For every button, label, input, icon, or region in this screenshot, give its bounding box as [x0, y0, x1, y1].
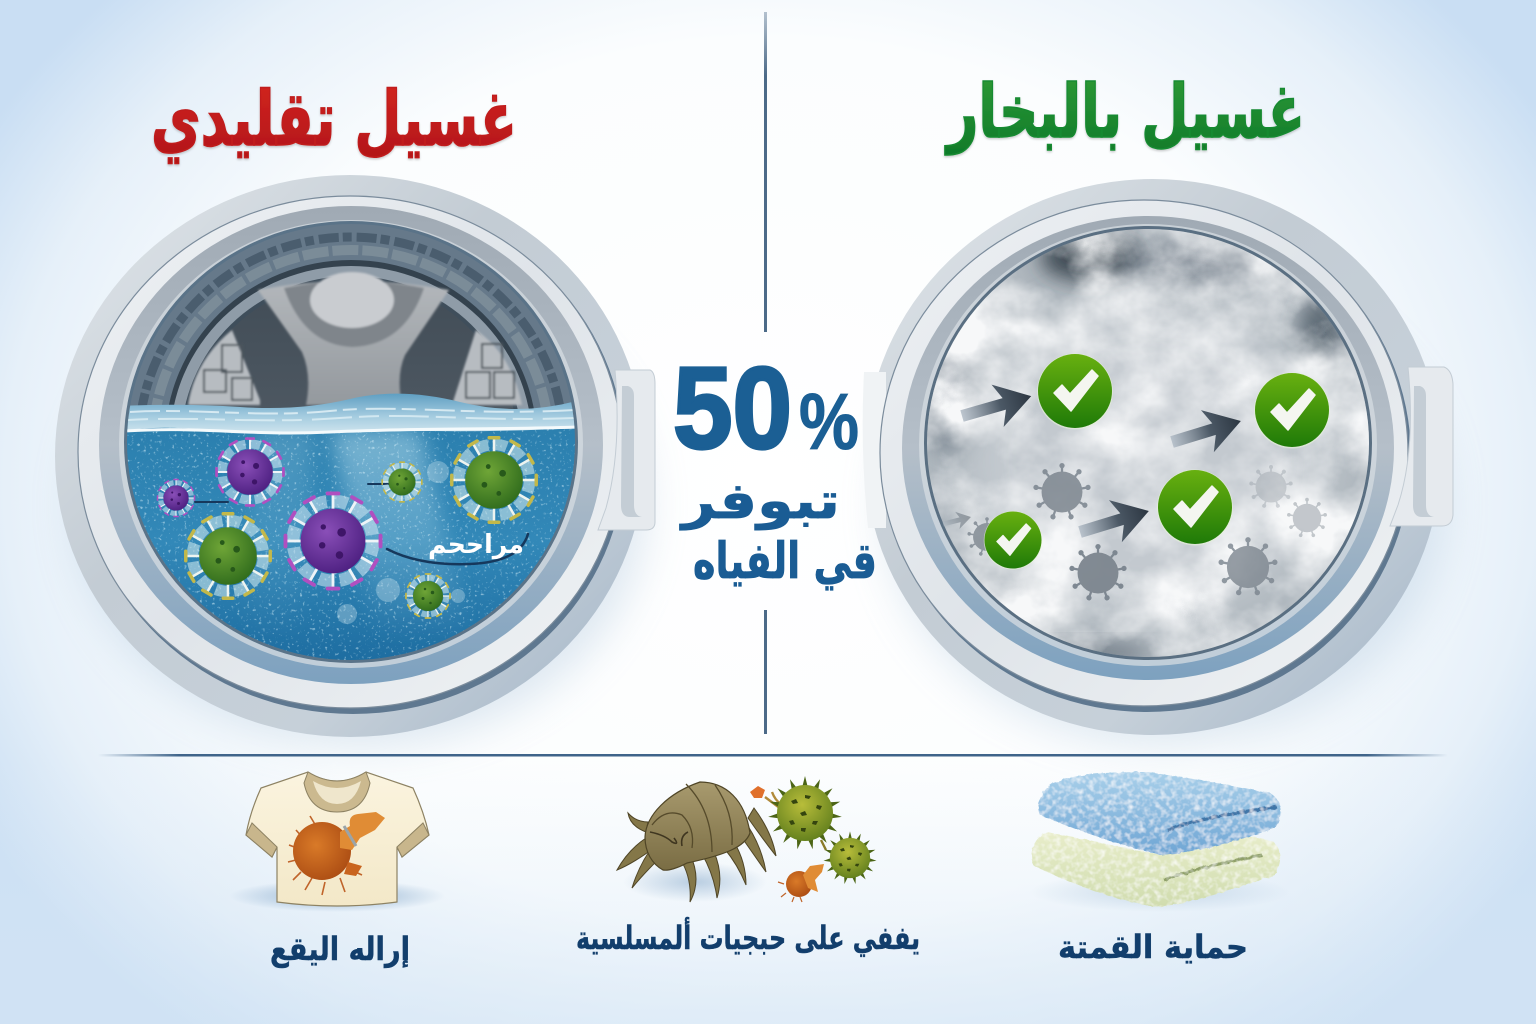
water surface foam: [120, 394, 580, 434]
label: stain removal: إراله اليقع: [270, 930, 410, 969]
small orange stain mite: [786, 871, 812, 897]
blue towel: [1038, 772, 1281, 855]
centre stat: 50 percent: [673, 343, 859, 473]
label: eliminates allergens: يففي على حبجيات ألمسلسية: [576, 917, 920, 957]
icon: stained t-shirt: [229, 772, 445, 912]
pale ghost viruses: [337, 461, 465, 624]
arrow: middle: [1074, 490, 1155, 553]
steam cloud: [920, 225, 1380, 665]
viruses in water: [158, 438, 536, 618]
check badges: [984, 354, 1330, 570]
centre stat caption: تبوفر: [678, 472, 840, 531]
arrow: faded small: [941, 508, 973, 533]
centre stat caption: [678, 472, 877, 590]
allergen balls: [765, 792, 795, 812]
drum tread right: [452, 330, 522, 405]
centre stat: 50 percent: %: [799, 377, 859, 466]
door outer rings: [863, 179, 1441, 735]
drum interior: [130, 224, 571, 409]
door handle: [598, 370, 655, 530]
door outer rings: [55, 175, 645, 737]
door handle: [1390, 367, 1453, 526]
heading: steam wash: غسيل بالبخار: [944, 69, 1305, 155]
drum paddle hub: [258, 281, 449, 405]
green towel: [1032, 832, 1280, 907]
arrow: top right: [1166, 400, 1247, 463]
icon: dust mite and allergens: [617, 776, 877, 902]
drum tread left: [188, 330, 260, 405]
label: fabric protection: حماية القمتة: [1058, 928, 1248, 966]
arrow: top left: [956, 375, 1037, 437]
panel: traditional washer door: [55, 175, 655, 745]
centre stat: 50 percent: 50: [673, 343, 792, 473]
door shadow: [885, 265, 1445, 745]
garbled white label in water: مراححم: [428, 530, 524, 560]
centre stat caption: قي الفياه: [693, 532, 877, 590]
water: [120, 394, 590, 665]
panel: steam washer door: [863, 179, 1453, 745]
icon: folded towels: [1030, 772, 1290, 912]
centre vertical divider: [764, 12, 767, 734]
faded viruses in steam: [967, 463, 1327, 601]
dark streaks: [195, 484, 528, 564]
horizontal divider: [98, 754, 1448, 756]
heading: traditional wash: غسيل تقليدي: [151, 74, 517, 164]
door shadow: [75, 265, 645, 745]
